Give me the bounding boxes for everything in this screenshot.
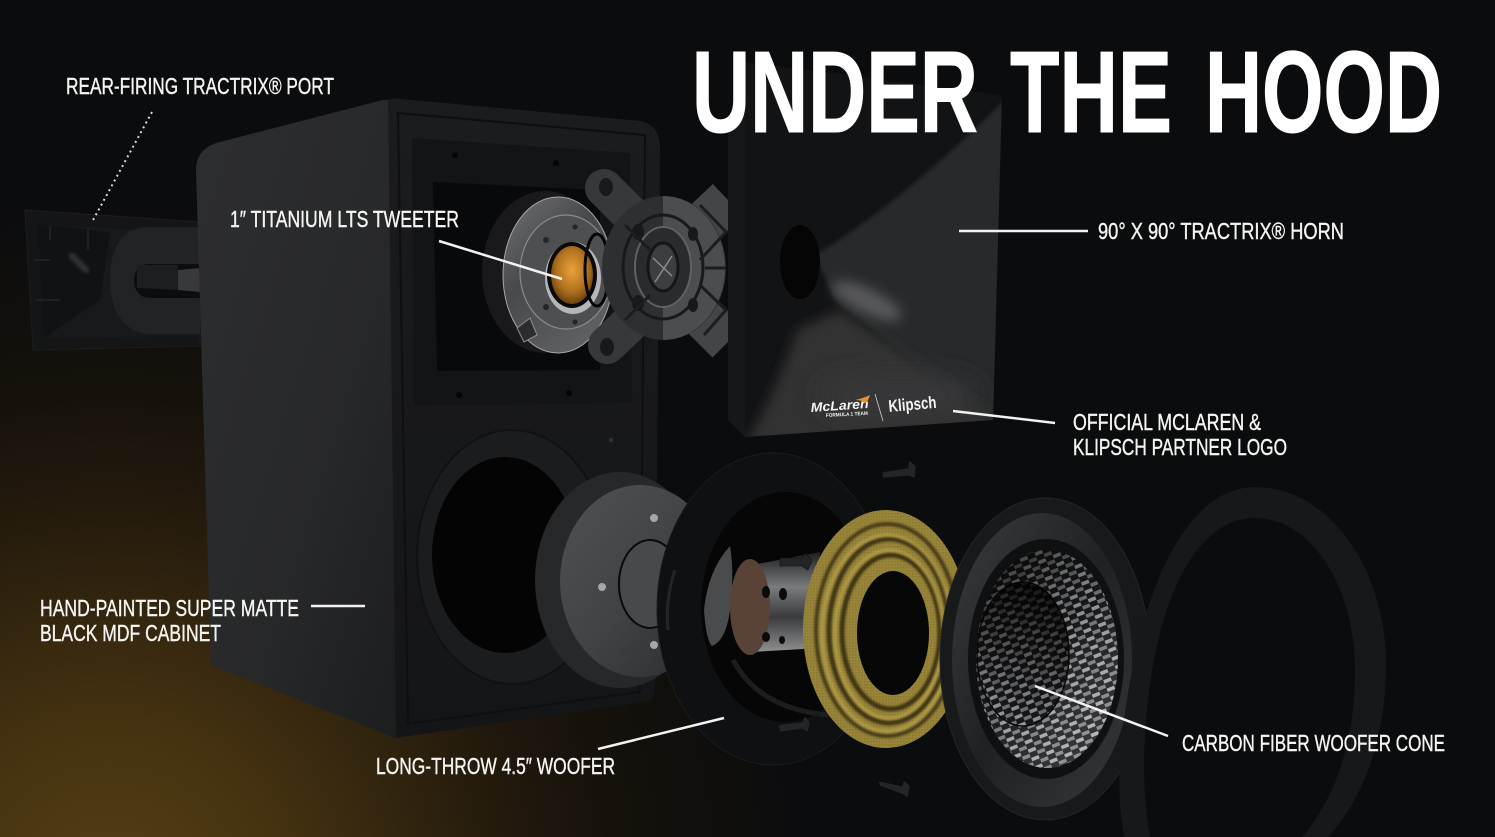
label: carbon cone	[1035, 686, 1445, 756]
label: partner logo: KLIPSCH PARTNER LOGO	[1073, 434, 1287, 460]
tweeter recess	[412, 138, 632, 406]
label: cabinet: HAND-PAINTED SUPER MATTE	[40, 595, 299, 621]
label: horn: 90° X 90° TRACTRIX® HORN	[1098, 218, 1344, 244]
McLaren and Klipsch partner logo: FORMULA 1 TEAM	[826, 411, 868, 419]
label: tweeter: 1″ TITANIUM LTS TWEETER	[230, 206, 459, 232]
label: partner logo	[953, 409, 1287, 460]
cabinet front baffle	[388, 99, 660, 738]
tractrix horn	[728, 100, 1002, 437]
label: woofer: LONG-THROW 4.5″ WOOFER	[376, 753, 615, 779]
woofer basket frame	[657, 453, 889, 765]
carbon cone	[976, 550, 1118, 768]
label: cabinet	[40, 595, 365, 646]
label: rear-firing port	[66, 73, 334, 222]
McLaren and Klipsch partner logo: Klipsch	[888, 393, 937, 416]
tweeter opening	[433, 182, 600, 371]
label: cabinet: BLACK MDF CABINET	[40, 620, 221, 646]
woofer motor with voice coil	[730, 552, 820, 655]
horn lit facets	[745, 95, 1010, 445]
tweeter driver	[482, 191, 613, 353]
mounting screws	[778, 460, 916, 798]
carbon fiber woofer	[940, 498, 1150, 820]
surround ridges	[816, 524, 958, 736]
tweeter mounting bracket	[599, 178, 728, 356]
McLaren and Klipsch partner logo	[810, 393, 937, 421]
rear tractrix port	[25, 210, 200, 350]
baffle bezel	[398, 113, 645, 724]
woofer rubber frame	[940, 498, 1150, 820]
label: tweeter	[230, 206, 562, 279]
dust cap	[977, 582, 1069, 726]
speaker cabinet	[196, 99, 660, 738]
cabinet side panel	[196, 100, 396, 738]
title	[692, 27, 1442, 157]
label: rear-firing port: REAR-FIRING TRACTRIX® PORT	[66, 73, 334, 99]
woofer magnet	[535, 472, 720, 688]
horn throat	[780, 225, 820, 299]
title: THE	[1010, 27, 1172, 157]
front trim ring	[1119, 487, 1386, 837]
screw holes	[452, 152, 613, 442]
surround centre hole	[857, 571, 929, 695]
title: UNDER	[692, 27, 978, 157]
label: woofer	[376, 718, 724, 779]
McLaren and Klipsch partner logo: McLaren	[810, 396, 869, 415]
woofer opening	[417, 430, 607, 684]
label: partner logo: OFFICIAL MCLAREN &	[1073, 409, 1261, 435]
yellow fabric surround	[803, 510, 969, 748]
